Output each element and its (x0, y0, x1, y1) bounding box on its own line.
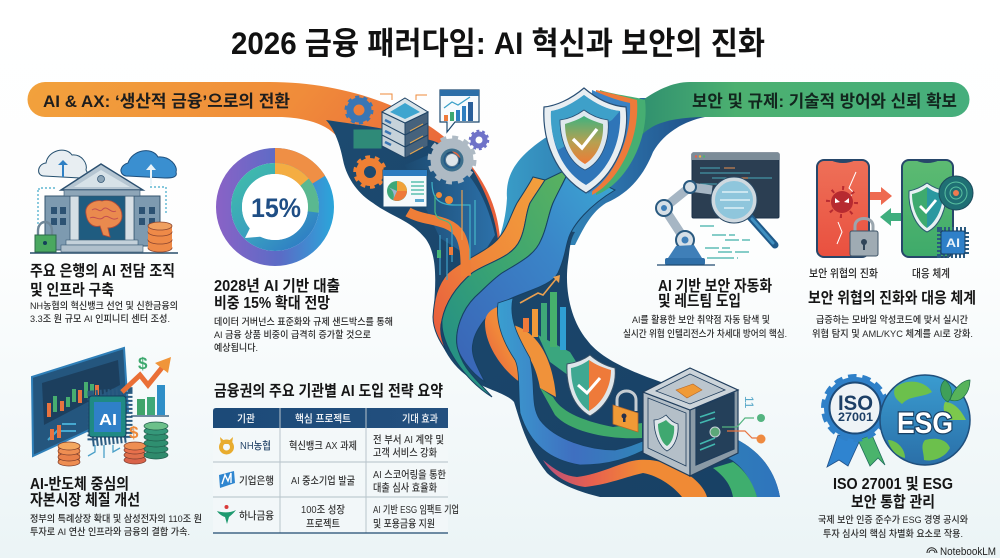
dark central body (326, 120, 780, 497)
columns (70, 196, 79, 241)
heading: capital market (30, 475, 140, 509)
row: Hana: 프로젝트 (306, 518, 340, 530)
icon: connector lines (380, 94, 427, 100)
heading: loan share (214, 277, 340, 312)
row: IBK (219, 468, 446, 494)
table: institution AI strategies (213, 408, 459, 533)
hall (76, 192, 130, 240)
phone captions (809, 266, 950, 280)
heading: security automation: 및 레드팀 도입 (658, 292, 741, 310)
icon: AI chip and capital market (32, 348, 171, 466)
row: Hana: AI 기반 ESG 임팩트 기업 (373, 503, 459, 516)
text block: ISO ESG: 국제 보안 인증 준수가 ESG 경영 공시와 (818, 514, 968, 526)
bottom orange strand (543, 460, 707, 497)
vault door shield (654, 415, 678, 451)
code window (692, 153, 779, 218)
left banner heading: AI & AX: ‘생산적 금융’으로의 전환 (43, 92, 290, 111)
text block: threat response: 위협 탐지 및 AML/KYC 체계를 AI로 강화. (812, 328, 973, 340)
icon: left cloud (39, 150, 87, 178)
heading: AI organisation: 주요 은행의 AI 전담 조직 (30, 262, 175, 280)
central flow ribbons (28, 82, 970, 497)
heading: capital market: 자본시장 체질 개선 (30, 491, 140, 509)
logo: IBK (219, 471, 235, 488)
steps (66, 240, 138, 245)
upper blue ribbon (457, 168, 615, 382)
row: NH (220, 433, 444, 459)
lower green strand (538, 335, 580, 378)
chip: AI (99, 412, 117, 429)
icon: brain (86, 200, 122, 237)
row: IBK: 대출 심사 효율화 (373, 482, 437, 494)
dollar signs: $ (138, 354, 148, 373)
small bars (131, 385, 169, 416)
magnifier (711, 177, 775, 245)
heading: loan share: 2028년 AI 기반 대출 (214, 277, 340, 295)
shield (909, 183, 946, 232)
logo: Hana (217, 505, 236, 524)
arm (656, 181, 715, 265)
icon: server stack (382, 98, 428, 158)
lower right blue flow (715, 440, 780, 497)
row: IBK: AI 중소기업 발굴 (291, 474, 355, 487)
loose code lines (700, 226, 750, 258)
circuit lines (432, 182, 475, 280)
phone captions: 대응 체계 (912, 266, 950, 280)
red arrow (870, 187, 892, 205)
icon: pie chart window (383, 170, 427, 207)
row: IBK: AI 스코어링을 통한 (373, 468, 446, 481)
heading: loan share: 비중 15% 확대 전망 (214, 294, 330, 312)
text block: loan share: AI 금융 상품 비중이 급격히 증가할 것으로 (214, 329, 371, 341)
text block: AI organisation: NH농협의 혁신뱅크 선언 및 신한금융의 (30, 300, 178, 312)
row: NH: 고객 서비스 강화 (373, 447, 437, 459)
green arrow (880, 208, 901, 226)
icon: green lock (35, 222, 56, 252)
text block: AI organisation (30, 300, 178, 325)
vault top lock (676, 384, 702, 398)
icon: ISO 27001 badge (823, 376, 887, 467)
blue strand winding to lower right (497, 298, 650, 465)
heading: AI organisation: 및 인프라 구축 (30, 281, 114, 299)
monitor chart (32, 348, 128, 456)
growth arrow (122, 357, 171, 392)
logo: NH (220, 437, 233, 452)
right banner heading: 보안 및 규제: 기술적 방어와 신뢰 확보 (692, 92, 957, 111)
green phone (902, 160, 953, 257)
mini growth chart in the flow (520, 275, 566, 350)
heading: AI organisation (30, 262, 175, 299)
text block: security automation: 실시간 위협 인텔리전스가 차세대 방어의 핵심. (623, 328, 787, 340)
mid-blue glow inside body (405, 150, 495, 262)
heading: ISO ESG: 보안 통합 관리 (851, 493, 935, 511)
table header: 기관 (237, 413, 255, 425)
table header (213, 408, 448, 428)
icon: orange gear (355, 157, 385, 187)
icon: phones threat and response (817, 160, 973, 257)
icon: vault connectors: 11 (742, 396, 756, 409)
row: NH: 전 부서 AI 계약 및 (373, 433, 444, 446)
icon: secure vault (643, 368, 738, 476)
row: Hana: 및 포용금융 지원 (373, 517, 435, 530)
red phone (817, 160, 869, 257)
ribbons (827, 435, 860, 467)
text block: capital market: 투자로 AI 연산 인프라와 금융의 결합 가속. (30, 526, 190, 538)
row: Hana: 100조 성장 (301, 504, 345, 516)
text block: loan share: 데이터 거버넌스 표준화와 규제 샌드박스를 통해 (214, 316, 393, 328)
heading: threat response: 보안 위협의 진화와 대응 체계 (808, 289, 976, 307)
upper green ribbon (442, 168, 570, 397)
text block: threat response: 급증하는 모바일 악성코드에 맞서 실시간 (816, 314, 968, 326)
green strand at bottom right (713, 462, 757, 497)
icon: orange padlock (613, 391, 638, 432)
icon: ESG globe: ESG (897, 407, 953, 440)
AI chip: AI (946, 236, 960, 250)
coin stacks (58, 442, 146, 466)
table heading: 금융권의 주요 기관별 AI 도입 전략 요약 (214, 382, 443, 400)
lower orange strand (485, 307, 525, 385)
icon: robot arm with magnifier (656, 153, 779, 265)
icon: small shield (567, 355, 615, 416)
row: Hana: 하나금융 (239, 509, 274, 522)
icon: green test panel (353, 129, 382, 149)
text block: loan share (214, 316, 393, 354)
phone captions: 보안 위협의 진화 (809, 266, 878, 280)
text block: loan share: 예상됩니다. (214, 342, 258, 354)
icon: blue gear (346, 97, 372, 123)
virus (828, 188, 856, 216)
icon: main security shield (544, 88, 646, 195)
icon: orange database (148, 222, 172, 252)
icon: large grey gear (430, 138, 474, 182)
heading: ISO ESG: ISO 27001 및 ESG (833, 475, 953, 493)
heading: security automation: AI 기반 보안 자동화 (658, 277, 772, 295)
icon: chart window (440, 90, 479, 132)
heading: security automation (658, 277, 772, 310)
icon: AI chip and capital market: $ (129, 423, 139, 442)
text block: security automation (623, 314, 787, 340)
icon: ISO 27001 badge: 27001 (838, 412, 874, 424)
wings (45, 196, 71, 250)
right green banner ribbon (636, 82, 970, 142)
text block: security automation: AI를 활용한 보안 취약점 자동 탐색 및 (632, 314, 770, 326)
text block: AI organisation: 3.3조 원 규모 AI 인피니티 센터 조성. (30, 313, 170, 325)
text block: capital market: 정부의 특례상장 확대 및 삼성전자의 110조 원 (30, 513, 202, 525)
right blue ribbon (497, 98, 705, 245)
radar (939, 176, 973, 210)
second orange strand (510, 325, 556, 397)
row: NH: 혁신뱅크 AX 과제 (289, 439, 357, 452)
icon: AI technology collage (346, 90, 488, 207)
orange circuit ribbon (408, 212, 466, 276)
text block: threat response (812, 314, 973, 340)
text block: ISO ESG (818, 514, 968, 540)
row: Hana (217, 503, 459, 530)
left orange banner ribbon (28, 82, 500, 250)
icon: ESG globe (880, 375, 970, 465)
pediment (61, 164, 143, 190)
heading: ISO ESG (833, 475, 953, 511)
text block: capital market (30, 513, 202, 538)
donut chart: 15 percent: 15% (251, 193, 301, 223)
dotted data lines (38, 187, 166, 236)
donut chart: 15 percent (224, 156, 326, 258)
table header: 기대 효과 (402, 413, 438, 425)
title: 2026 금융 패러다임: AI 혁신과 보안의 진화 (231, 25, 765, 61)
icon: bank with AI brain (30, 150, 178, 253)
heading: capital market: AI-반도체 중심의 (30, 475, 129, 493)
upper orange ribbon (433, 177, 545, 352)
padlock (850, 218, 878, 256)
text block: ISO ESG: 투자 심사의 핵심 차별화 요소로 작용. (823, 528, 963, 540)
icon: ISO 27001 badge: ISO (838, 392, 873, 415)
vault panel details (700, 412, 715, 450)
row: IBK: 기업은행 (239, 474, 274, 487)
icon: vault connectors (722, 396, 766, 444)
icon: purple gear (470, 131, 488, 149)
AI chip (940, 230, 966, 255)
table header: 핵심 프로젝트 (295, 413, 351, 425)
row: NH: NH농협 (240, 439, 271, 452)
icon: right cloud (121, 151, 176, 185)
